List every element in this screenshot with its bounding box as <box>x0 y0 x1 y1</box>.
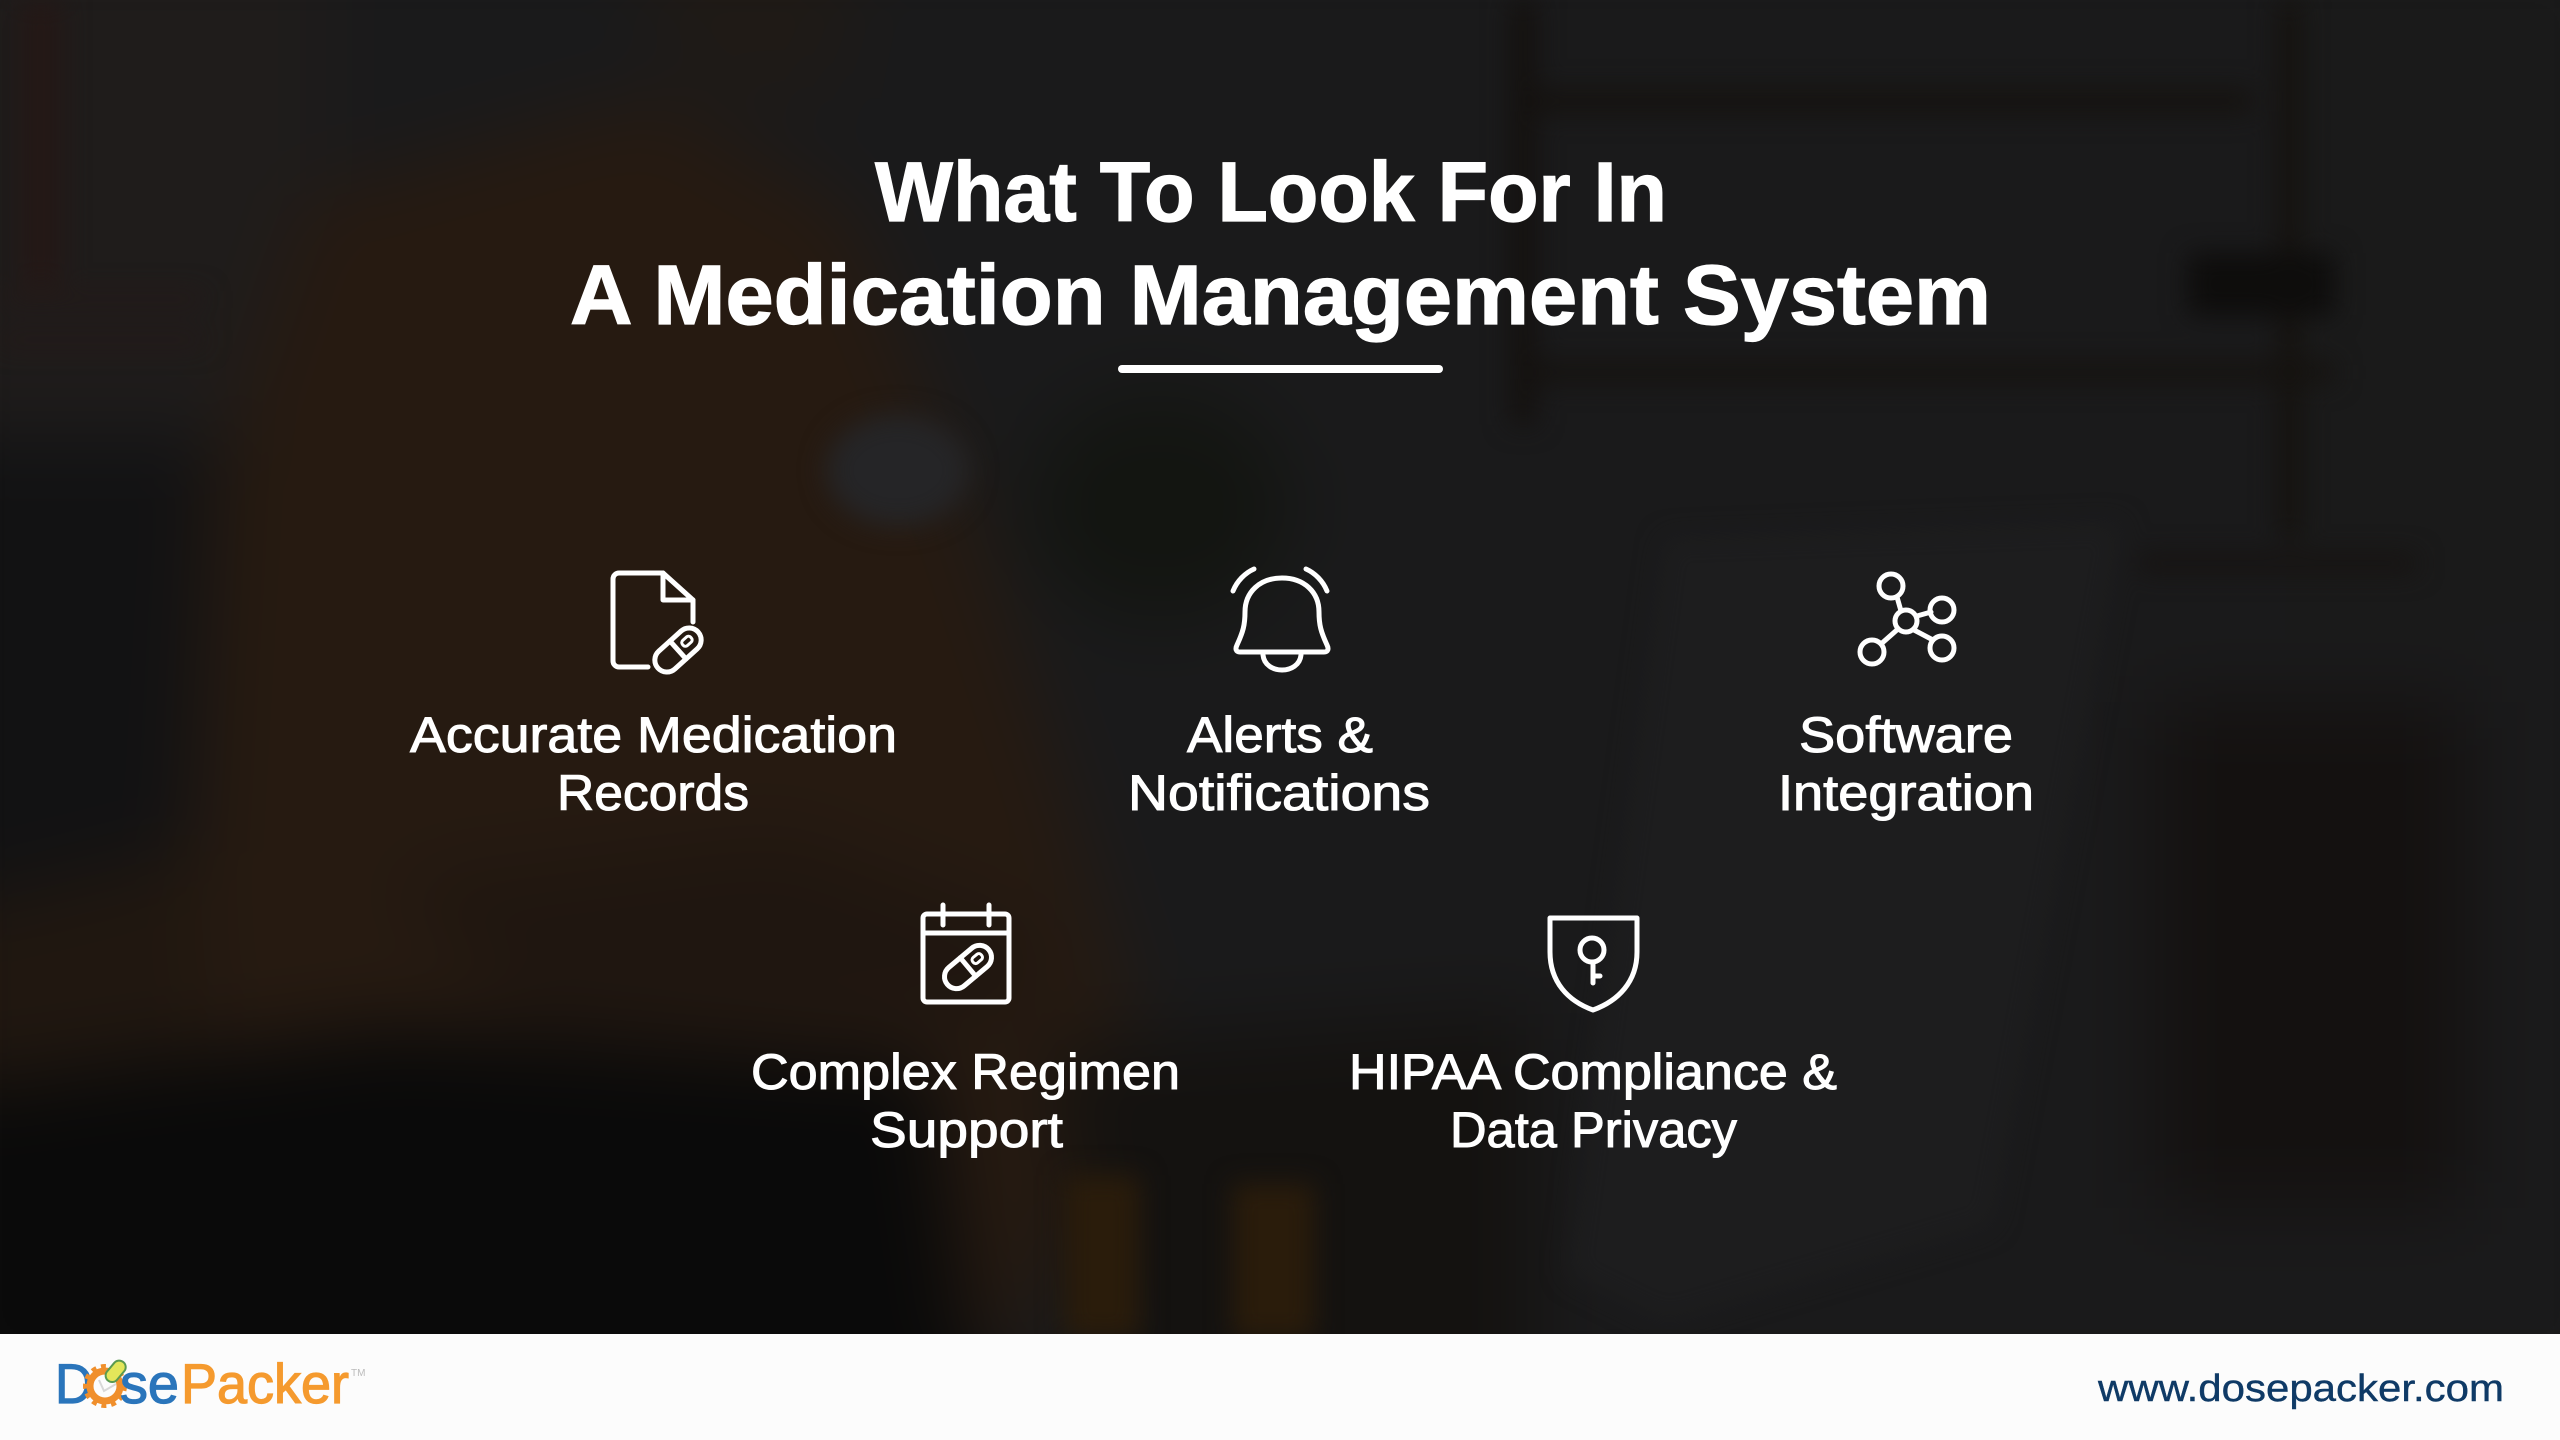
icon: network nodes <box>1860 574 1954 664</box>
label: Accurate Medication <box>410 707 897 763</box>
icon: document with pill <box>613 573 706 677</box>
title: A Medication Management System <box>570 248 1991 342</box>
feature: accurate medication records <box>410 573 897 821</box>
logo: DosePacker: se <box>120 1352 179 1415</box>
feature: alerts and notifications <box>1128 569 1430 821</box>
label: Support <box>870 1102 1063 1158</box>
logo: DosePacker: TM <box>351 1368 365 1379</box>
title: What To Look For In <box>875 145 1667 239</box>
feature: complex regimen support <box>751 905 1180 1158</box>
label <box>1349 1044 1837 1158</box>
label: Records <box>557 765 749 821</box>
title underline <box>1118 365 1443 373</box>
feature: hipaa compliance and data privacy <box>1349 918 1837 1158</box>
label <box>410 707 897 821</box>
icon: orange gear with pill <box>85 1358 128 1406</box>
website url: www.dosepacker.com <box>2097 1368 2504 1410</box>
label: HIPAA Compliance & <box>1349 1044 1837 1100</box>
icon: shield with key <box>1550 918 1637 1010</box>
footer bar <box>0 1334 2560 1440</box>
title <box>570 145 1991 342</box>
label: Software <box>1799 707 2013 763</box>
icon: calendar with pill <box>923 905 1009 1002</box>
logo: DosePacker: Packer <box>181 1352 349 1415</box>
label: Data Privacy <box>1450 1102 1737 1158</box>
label <box>1128 707 1430 821</box>
logo: DosePacker <box>55 1352 365 1415</box>
logo: DosePacker: D <box>55 1352 93 1415</box>
label: Integration <box>1778 765 2034 821</box>
label: Alerts & <box>1187 707 1373 763</box>
label: Complex Regimen <box>751 1044 1180 1100</box>
label: Notifications <box>1128 765 1430 821</box>
label <box>751 1044 1180 1158</box>
label <box>1778 707 2034 821</box>
icon: bell <box>1233 569 1328 670</box>
feature: software integration <box>1778 574 2034 821</box>
